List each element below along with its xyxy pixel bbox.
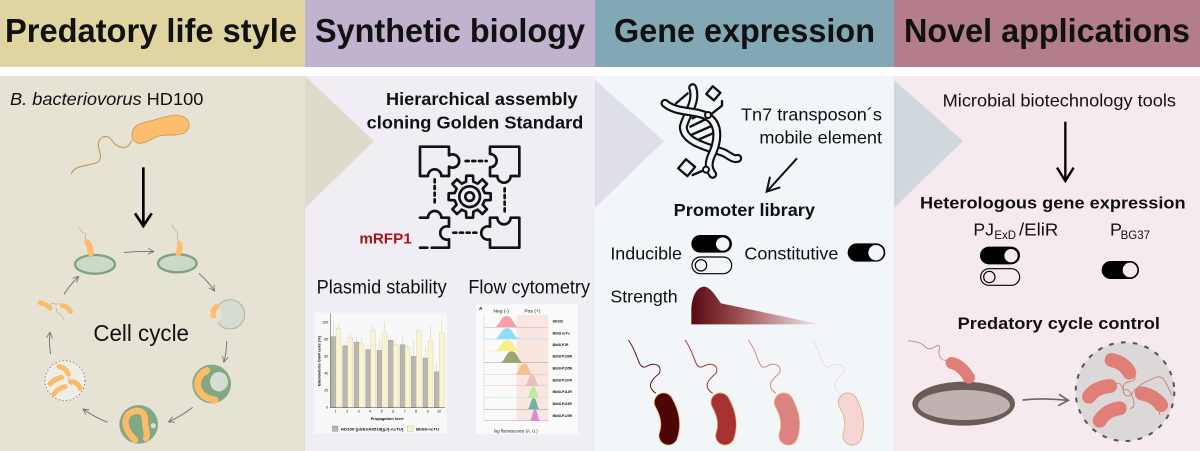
bar chart: plasmid stability: 4 <box>369 410 371 414</box>
text: Tn7 mobile element: Tn7 transposon´s <box>741 105 882 125</box>
icon: DNA with mobile element <box>665 86 738 176</box>
toggle: PBG37 <box>1102 261 1139 279</box>
bar chart: plasmid stability: 60 <box>324 354 328 358</box>
arrow: element to library <box>767 158 797 192</box>
toggle: constitutive <box>848 243 885 262</box>
label: PBG37 <box>1110 220 1150 242</box>
heading: assembly: Hierarchical assembly <box>386 89 578 109</box>
bar chart: plasmid stability: Bb08-ncTU <box>416 427 439 432</box>
icon: lysing prey with progeny <box>1076 342 1174 441</box>
gradient: strength wedge <box>691 287 821 324</box>
bar chart: plasmid stability: 20 <box>324 389 328 393</box>
cycle stage: attachment <box>75 227 115 274</box>
panel: gene expression <box>595 76 894 451</box>
bar chart: plasmid stability: 0 <box>326 406 328 410</box>
text: biotechnology tools: Microbial biotechnology tools <box>943 91 1176 111</box>
heading: promoter library: Promoter library <box>674 200 815 220</box>
arrow: bacterium to cycle <box>135 167 152 226</box>
chart: flow cytometry: Neg (-) <box>493 308 509 314</box>
panel: predatory life style <box>0 76 305 451</box>
bar chart: plasmid stability: HD100 [pSEVA6518[gJ]-ncTU] <box>341 427 404 432</box>
heading: predatory cycle control: Predatory cycle control <box>958 314 1160 333</box>
heading: assembly <box>367 89 583 132</box>
bar chart: plasmid stability: 40 <box>324 372 328 376</box>
chart: flow cytometry: Bb08-P120R <box>553 414 573 418</box>
bar chart: plasmid stability <box>314 313 447 433</box>
bar chart: plasmid stability: 5 <box>381 410 383 414</box>
icon: bacterium on prey <box>908 341 1015 426</box>
arrow: infection to lysis <box>1023 394 1068 406</box>
label: PBG37: BG37 <box>1121 229 1150 242</box>
header: Novel applications <box>894 0 1200 67</box>
species label: B. bacteriovorus HD100 <box>10 89 203 109</box>
chart: flow cytometry: Pos (+) <box>524 308 541 314</box>
panel: synthetic biology <box>305 76 595 451</box>
chart: flow cytometry: Bb08-P116R <box>553 402 572 406</box>
header: Novel applications: Novel applications <box>904 12 1190 49</box>
chart: flow cytometry: Bb08-P100R <box>553 355 573 359</box>
chart: flow cytometry: Bb08-ncTu <box>553 331 570 335</box>
panel: novel applications <box>894 76 1200 451</box>
heading: flow cytometry: Flow cytometry <box>468 277 590 298</box>
label: mRFP1: mRFP1 <box>359 231 412 247</box>
label: PJExD/EliR: /EliR <box>1019 220 1058 240</box>
bar chart: plasmid stability: 6 <box>392 410 394 414</box>
cycle stage: septation <box>119 405 158 444</box>
bar chart: plasmid stability: Propagation level <box>371 416 404 421</box>
text: Tn7 mobile element <box>741 105 882 147</box>
cycle stage: penetration <box>158 225 197 272</box>
label: PJExD/EliR <box>973 220 1058 242</box>
heading: heterologous expression: Heterologous gene expression <box>920 193 1186 212</box>
toggle: PJExD pair <box>980 247 1020 285</box>
chart: flow cytometry: HD100 <box>553 320 563 324</box>
cycle stage: release <box>40 303 71 319</box>
header: Gene expression: Gene expression <box>614 12 875 49</box>
label: PJExD/EliR: ExD <box>994 229 1016 242</box>
bar chart: plasmid stability: 1 <box>335 410 337 414</box>
label: strength: Strength <box>610 287 678 307</box>
bar chart: plasmid stability: 9 <box>427 410 429 414</box>
chart: flow cytometry: Bb08-PJR <box>553 343 569 347</box>
arrow: tools to expression <box>1057 122 1074 181</box>
header: Gene expression <box>595 0 894 67</box>
header: Synthetic biology: Synthetic biology <box>315 12 586 49</box>
chart: flow cytometry: A <box>479 306 483 311</box>
cycle stage: lysis <box>45 361 85 401</box>
bar chart: plasmid stability: 10 <box>437 410 441 414</box>
heading: plasmid stability: Plasmid stability <box>317 277 447 298</box>
icon: large bacterium <box>71 115 189 174</box>
chart: flow cytometry: log fluorescence (A. U.) <box>494 428 538 433</box>
cycle arrows <box>49 251 227 422</box>
chart: flow cytometry: Bb08-P107R <box>553 378 573 382</box>
text: Tn7 mobile element: mobile element <box>759 127 882 147</box>
toggle: inducible pair <box>691 235 732 274</box>
cycle label: Cell cycle <box>93 320 189 346</box>
icon: puzzle and gear <box>420 147 519 248</box>
label: constitutive: Constitutive <box>744 243 838 263</box>
header: Synthetic biology <box>305 0 595 67</box>
bar chart: plasmid stability: 3 <box>358 410 360 414</box>
heading: assembly: cloning Golden Standard <box>367 112 583 132</box>
cycle stage: growth <box>192 365 231 403</box>
chart: flow cytometry <box>476 304 578 434</box>
label: PBG37: P <box>1110 220 1122 240</box>
chart: flow cytometry: Bb08-P112R <box>553 390 572 394</box>
bar chart: plasmid stability: Bdellovibrio GmR cells (%) <box>317 335 321 386</box>
bar chart: plasmid stability: 80 <box>324 337 328 341</box>
bar chart: plasmid stability: 7 <box>404 410 406 414</box>
label: inducible: Inducible <box>610 243 682 263</box>
header: Predatory life style <box>0 0 305 67</box>
label: PJExD/EliR: PJ <box>973 220 994 240</box>
cycle stage: bdelloplast <box>204 300 245 329</box>
bar chart: plasmid stability: 8 <box>415 410 417 414</box>
bacteria: expression levels <box>628 340 854 436</box>
header: Predatory life style: Predatory life style <box>5 12 297 49</box>
chart: flow cytometry: Bb08-P105R <box>553 367 573 371</box>
bar chart: plasmid stability: 100 <box>322 320 328 324</box>
bar chart: plasmid stability: 2 <box>346 410 348 414</box>
